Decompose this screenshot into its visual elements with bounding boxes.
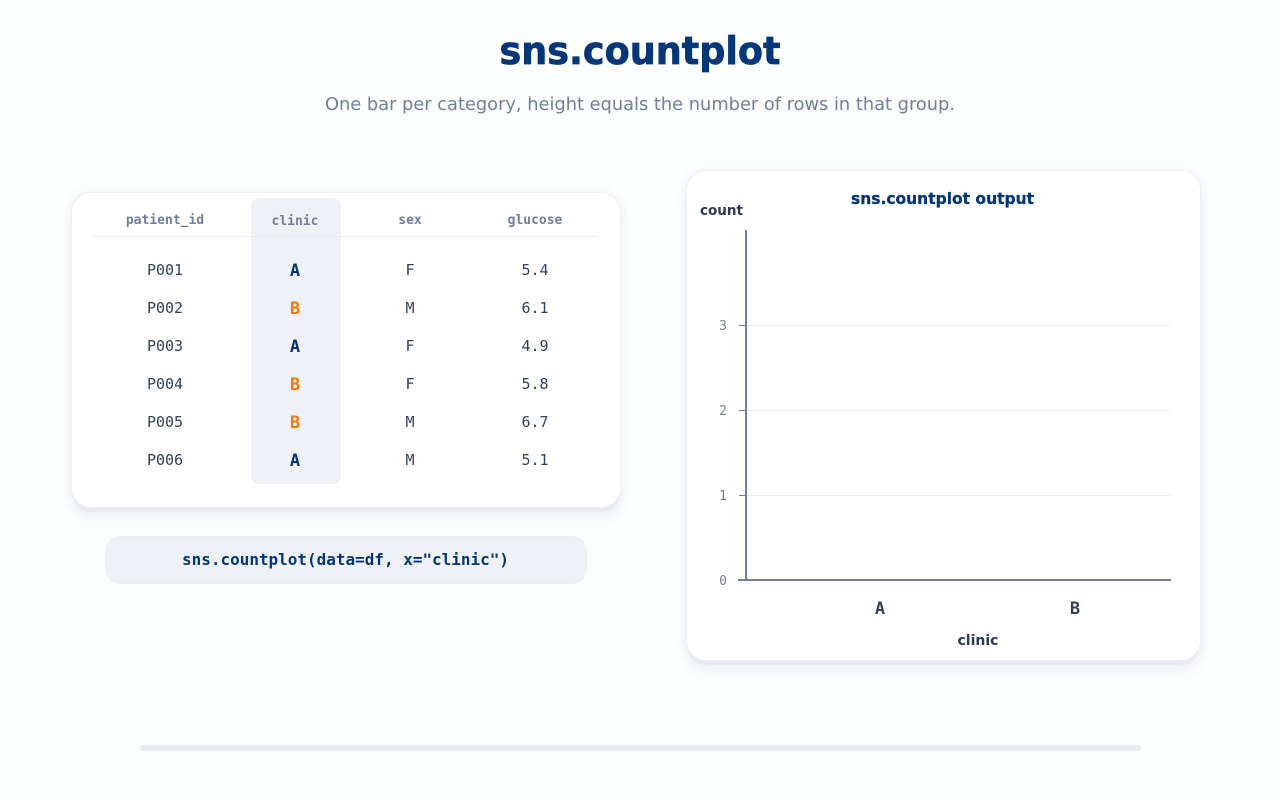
table rows: P001 <box>147 261 183 279</box>
table rows: F <box>405 375 415 393</box>
highlighted clinic column <box>251 198 341 484</box>
y axis ticks: 1 <box>719 489 727 504</box>
axes <box>738 230 1171 581</box>
table header: clinic <box>272 214 318 229</box>
table rows: F <box>405 337 415 355</box>
table header: patient_id <box>126 213 204 228</box>
gridlines <box>746 326 1171 496</box>
code pill: sns.countplot(data=df, x="clinic") <box>182 550 509 569</box>
y axis title: count <box>700 203 743 219</box>
clinic values: B <box>290 413 300 433</box>
progress bar track <box>140 745 1141 751</box>
table rows: 5.4 <box>521 261 549 279</box>
table rows: P005 <box>147 413 183 431</box>
chart title: sns.countplot output <box>851 189 1034 208</box>
table header: glucose <box>508 213 563 228</box>
y axis ticks: 0 <box>719 574 727 589</box>
x axis categories <box>875 599 1080 619</box>
clinic values: A <box>290 337 300 357</box>
clinic values: A <box>290 451 300 471</box>
table rows: 5.8 <box>521 375 549 393</box>
table rows: P004 <box>147 375 183 393</box>
y axis ticks: 3 <box>719 319 727 334</box>
x axis categories: B <box>1070 599 1080 619</box>
table header <box>126 213 563 229</box>
x axis title: clinic <box>958 633 998 649</box>
table rows: 5.1 <box>521 451 549 469</box>
subtitle: One bar per category, height equals the number of rows in that group. <box>325 94 955 115</box>
table rows: 6.7 <box>521 413 549 431</box>
panel: data table <box>71 192 621 508</box>
table rows: P002 <box>147 299 183 317</box>
clinic values: B <box>290 375 300 395</box>
clinic values <box>290 261 300 471</box>
table rows: F <box>405 261 415 279</box>
clinic values: B <box>290 299 300 319</box>
clinic values: A <box>290 261 300 281</box>
title: sns.countplot <box>500 29 780 73</box>
table rows: 6.1 <box>521 299 549 317</box>
table rows: M <box>405 413 415 431</box>
x axis categories: A <box>875 599 885 619</box>
table rows: M <box>405 451 415 469</box>
y axis ticks <box>719 319 727 589</box>
table rows: P003 <box>147 337 183 355</box>
table rows: 4.9 <box>521 337 549 355</box>
table rows: P006 <box>147 451 183 469</box>
code pill <box>105 536 587 584</box>
table rows: M <box>405 299 415 317</box>
panel: chart output <box>686 170 1201 661</box>
y axis ticks: 2 <box>719 404 727 419</box>
table header: sex <box>398 213 422 228</box>
table rows <box>147 261 549 469</box>
